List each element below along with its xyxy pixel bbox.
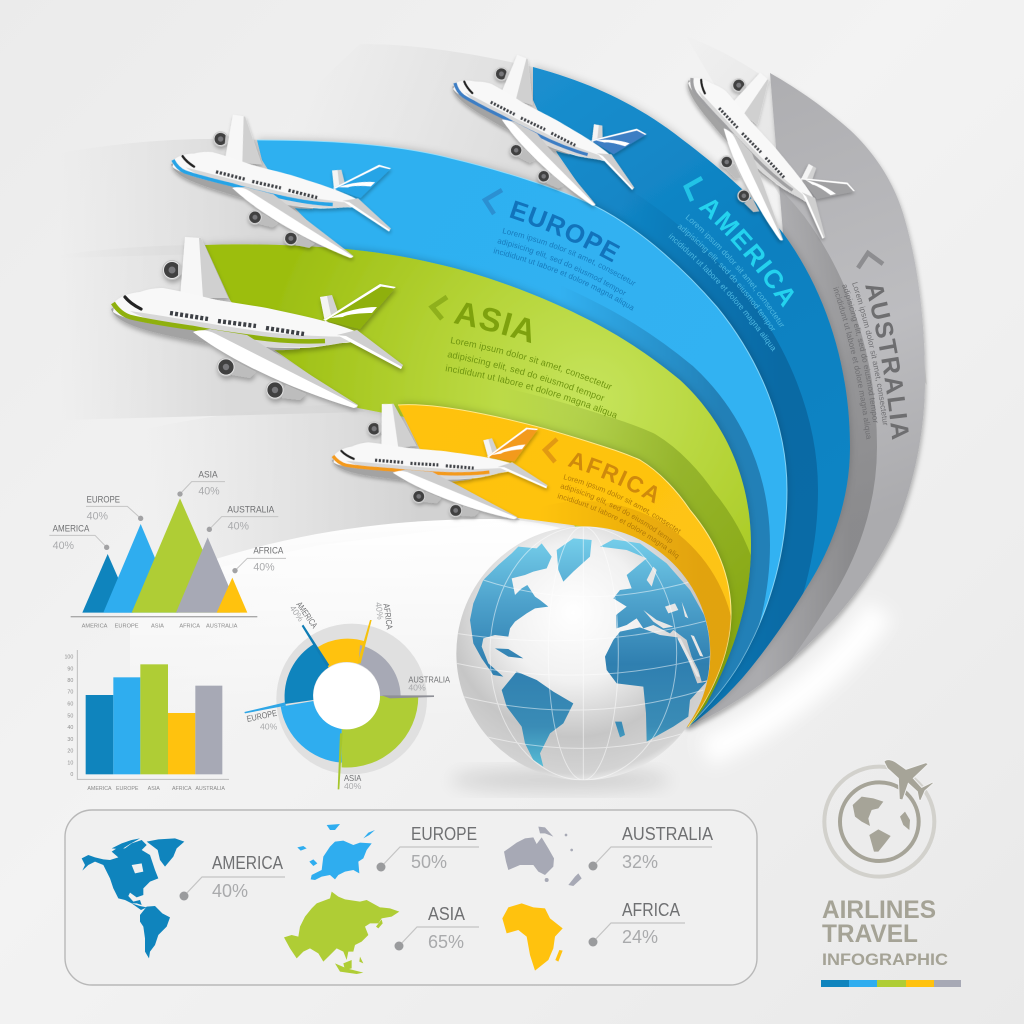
bar chart axis labels: AFRICA <box>172 786 192 792</box>
triangle chart <box>49 469 286 630</box>
donut labels: 40% <box>344 781 362 791</box>
Australia chevron <box>858 253 883 268</box>
plane: Europe <box>164 109 400 262</box>
callout: Africa 24%: AFRICA <box>622 900 680 920</box>
plane: Australia <box>646 41 880 261</box>
globe grid <box>457 527 710 780</box>
Asia text <box>446 336 616 418</box>
triangle chart callouts: 40% <box>198 486 220 498</box>
donut labels: AFRICA <box>381 603 395 630</box>
plane: Africa <box>328 392 550 533</box>
colour key bar <box>821 980 961 987</box>
Australia text: adipisicing elit, sed do eiusmod tempor <box>842 284 878 423</box>
continents on globe <box>470 538 711 767</box>
donut labels: 40% <box>373 602 386 620</box>
callout: Australia 32%: 32% <box>622 852 658 872</box>
map: America <box>82 838 184 958</box>
bar chart value axis: 60 <box>67 702 73 708</box>
panel: America band <box>530 64 852 726</box>
title: AIRLINES <box>822 896 936 924</box>
Europe text: incididunt ut labore et dolore magna aliqua <box>494 248 634 311</box>
triangle chart axis labels: EUROPE <box>115 624 139 630</box>
bar chart value axis: 0 <box>70 772 73 778</box>
callout: Asia 65%: 65% <box>428 932 464 952</box>
Africa text: incididunt ut labore et dolore magna aliqua <box>558 493 679 560</box>
globe shadow <box>450 769 670 791</box>
callout: Europe 50% <box>376 824 479 872</box>
plane: Asia <box>111 237 403 408</box>
America text: adipisicing elit, sed do eiusmod tempor <box>678 224 776 331</box>
callout: Africa 24% <box>588 900 685 947</box>
map: Australia <box>504 827 582 886</box>
donut labels <box>246 600 450 791</box>
donut labels: AMERICA <box>294 600 320 630</box>
Australia text <box>833 282 888 440</box>
triangle chart axis labels: AUSTRALIA <box>206 624 238 630</box>
Australia heading: AUSTRALIA <box>865 286 909 440</box>
panel: regional statistics <box>65 810 757 985</box>
globe <box>456 526 711 780</box>
donut labels: AUSTRALIA <box>408 675 450 685</box>
triangle chart callouts <box>49 469 286 574</box>
triangle chart callouts: EUROPE <box>87 494 120 504</box>
bar chart value axis: 80 <box>67 678 73 684</box>
donut labels: 40% <box>288 603 306 624</box>
America chevron <box>686 178 702 201</box>
title: TRAVEL <box>822 920 918 948</box>
triangle chart callouts: AFRICA <box>253 546 284 556</box>
donut labels: EUROPE <box>246 708 278 724</box>
America heading: AMERICA <box>698 200 794 308</box>
Europe chevron <box>485 190 502 214</box>
bar chart value axis: 90 <box>67 666 73 672</box>
bar chart value axis: 40 <box>67 725 73 731</box>
bar chart axis labels: AUSTRALIA <box>195 786 225 792</box>
bar chart value axis: 70 <box>67 690 73 696</box>
Europe heading: EUROPE <box>510 200 620 262</box>
Asia heading: ASIA <box>454 302 532 343</box>
title <box>822 896 948 969</box>
panel: Europe band <box>255 136 790 728</box>
bar chart axis labels: AMERICA <box>87 786 112 792</box>
donut labels: 40% <box>260 721 278 731</box>
callout: Asia 65% <box>394 904 479 952</box>
callout: America 40%: AMERICA <box>212 853 283 873</box>
title: INFOGRAPHIC <box>822 951 948 969</box>
Asia text: incididunt ut labore et dolore magna aliqua <box>446 364 616 418</box>
logo icon: globe and plane <box>824 760 934 877</box>
Asia text: adipisicing elit, sed do eiusmod tempor <box>448 352 604 401</box>
bar chart axis labels: ASIA <box>148 786 160 792</box>
Asia chevron <box>432 297 447 319</box>
Africa text <box>558 474 681 560</box>
callout: Asia 65%: ASIA <box>428 904 465 924</box>
panel: Asia band <box>205 240 754 727</box>
America text: Lorem ipsum dolor sit amet, consectetur <box>686 214 784 327</box>
triangle chart callouts: 40% <box>228 520 250 532</box>
triangle chart axis labels: AMERICA <box>82 624 108 630</box>
callout: Australia 32%: AUSTRALIA <box>622 824 713 844</box>
bars <box>86 664 222 774</box>
triangle chart callouts: AUSTRALIA <box>227 504 275 514</box>
triangle chart callouts: 40% <box>253 562 275 574</box>
triangle chart axis labels: ASIA <box>151 624 164 630</box>
Asia text: Lorem ipsum dolor sit amet, consectetur <box>450 336 612 390</box>
globe inland seas <box>643 567 703 677</box>
callout: America 40% <box>180 853 285 901</box>
panel: Australia band <box>685 73 928 732</box>
bar chart value axis: 10 <box>67 760 73 766</box>
map: Africa <box>502 903 563 971</box>
bar chart value axis <box>64 655 73 778</box>
plane: America <box>431 39 662 216</box>
triangle chart axis labels: AFRICA <box>179 624 200 630</box>
triangle chart callouts: 40% <box>87 510 109 522</box>
bar chart value axis: 50 <box>67 713 73 719</box>
callout: Africa 24%: 24% <box>622 927 658 947</box>
Australia text: Lorem ipsum dolor sit amet, consectetur <box>852 282 888 426</box>
Africa text: adipisicing elit, sed do eiusmod tempor <box>560 484 672 543</box>
Europe text: Lorem ipsum dolor sit amet, consectetur <box>502 228 636 286</box>
Africa heading: AFRICA <box>568 452 657 504</box>
panel: Africa band <box>84 116 772 764</box>
triangle chart callouts: AMERICA <box>53 524 90 534</box>
bar chart <box>64 650 229 792</box>
bar chart axis labels: EUROPE <box>116 786 139 792</box>
donut labels: ASIA <box>344 773 362 783</box>
map: Europe <box>297 824 375 880</box>
background swoosh tails <box>60 36 927 800</box>
America text: incididunt ut labore et dolore magna aliqua <box>668 233 775 352</box>
bar chart value axis: 20 <box>67 749 73 755</box>
callout: America 40%: 40% <box>212 881 248 901</box>
callout: Europe 50%: 50% <box>411 852 447 872</box>
callout: Australia 32% <box>588 824 713 872</box>
Australia text: incididunt ut labore et dolore magna aliqua <box>833 286 870 440</box>
bar chart value axis: 100 <box>64 655 73 661</box>
donut chart <box>244 600 450 791</box>
triangle chart axis labels <box>82 624 238 630</box>
triangle chart callouts: 40% <box>53 540 75 552</box>
bar chart axis labels <box>87 786 225 792</box>
callout: Europe 50%: EUROPE <box>411 824 477 844</box>
Africa text: Lorem ipsum dolor sit amet, consectetur <box>564 474 681 534</box>
triangle chart callouts: ASIA <box>198 469 218 479</box>
donut labels: 40% <box>408 683 426 693</box>
bar chart value axis: 30 <box>67 737 73 743</box>
Africa chevron <box>545 439 557 462</box>
Europe text: adipisicing elit, sed do eiusmod tempor <box>498 240 626 296</box>
map: Asia <box>284 892 399 974</box>
